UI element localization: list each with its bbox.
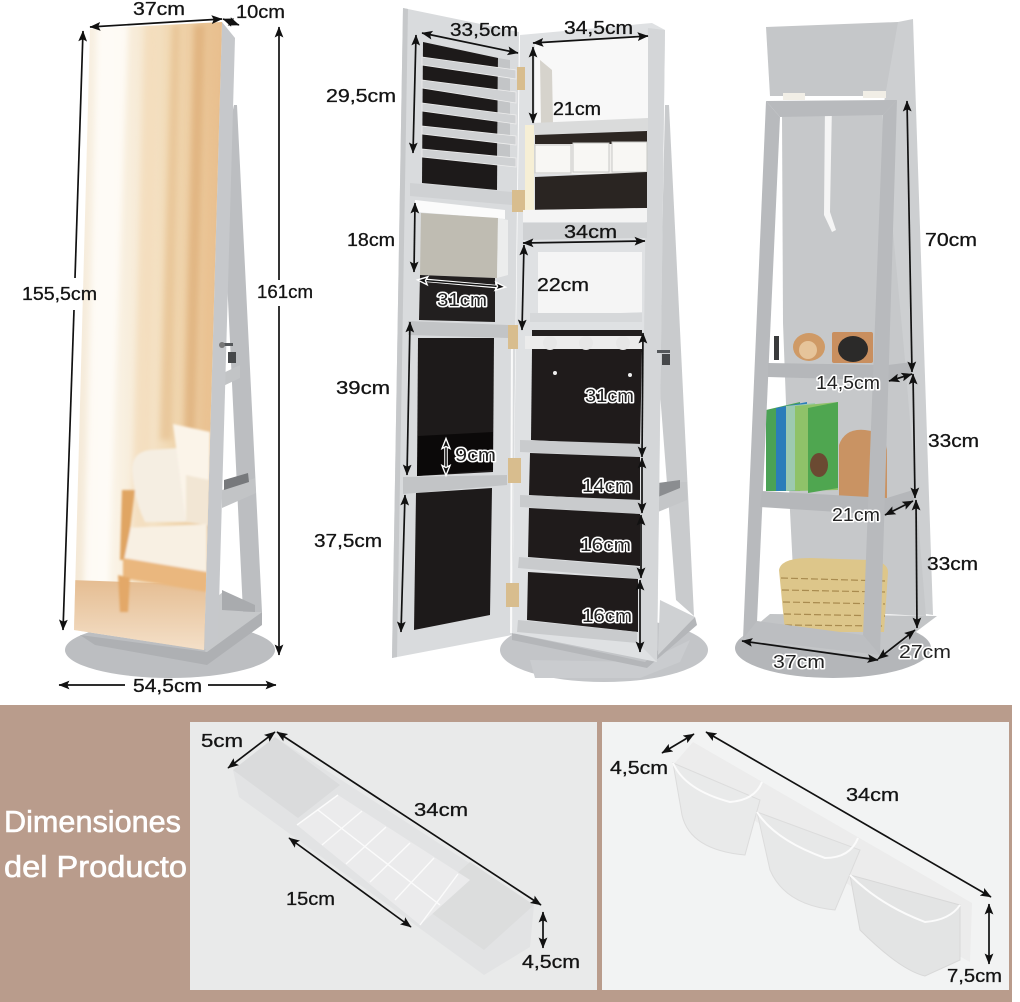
front frame with shelves	[743, 100, 914, 655]
grid 15cm: 15cm	[286, 889, 335, 909]
LED strip	[525, 125, 534, 210]
wicker basket	[779, 558, 888, 632]
clock and radio on top shelf	[793, 332, 873, 363]
depth 4,5cm: 4,5cm	[610, 758, 668, 778]
dimension labels: opened cabinet	[314, 18, 648, 652]
height 4,5cm: 4,5cm	[522, 952, 580, 972]
compartment 16cm: 16cm	[580, 535, 631, 555]
base width 54,5cm: 54,5cm	[133, 676, 202, 696]
length 34cm: 34cm	[846, 785, 899, 805]
depth 10cm	[223, 2, 285, 25]
gold hinges	[506, 67, 525, 607]
white organiser and drawer front	[523, 208, 647, 222]
compartment height 22cm: 22cm	[537, 275, 589, 295]
side key	[774, 336, 779, 360]
section 70cm	[907, 101, 977, 372]
compartment 16cm bottom	[582, 580, 640, 652]
pouch height 18cm: 18cm	[347, 230, 395, 250]
cabinet width 34,5cm: 34,5cm	[564, 18, 633, 38]
slats height 29,5cm: 29,5cm	[326, 86, 396, 106]
mirror key lock	[219, 342, 236, 363]
compartment 14cm	[582, 458, 642, 513]
three clear storage cups	[535, 142, 647, 174]
section 33cm lower	[916, 500, 978, 628]
rotating base	[735, 618, 931, 678]
base depth 27cm	[878, 630, 951, 662]
white strap	[824, 104, 836, 232]
section title: del Producto	[4, 849, 187, 884]
mirror with room reflection	[70, 15, 230, 655]
section title: Dimensiones	[4, 804, 181, 839]
back panel top and side	[766, 22, 899, 96]
base width 37cm	[742, 641, 878, 672]
width 37cm	[90, 0, 222, 27]
length 34cm: 34cm	[414, 800, 468, 820]
bottom band: accessories	[0, 705, 1012, 1002]
compartment 16cm bottom: 16cm	[582, 606, 632, 626]
length 34cm	[277, 732, 541, 905]
door necklace slats	[422, 57, 516, 167]
inner mirror upper compartment	[535, 37, 648, 133]
pouch height 18cm	[347, 203, 415, 272]
rotating base	[500, 618, 708, 682]
shelf depth 14,5cm	[816, 373, 912, 393]
door lower black boards	[419, 275, 495, 322]
section 33cm	[913, 374, 979, 498]
section 70cm: 70cm	[925, 230, 977, 250]
door upper black jewellery board	[422, 42, 498, 190]
cabinet frame	[512, 23, 665, 662]
mirror height 155,5cm	[22, 31, 97, 630]
depth 5cm	[201, 731, 275, 768]
pouch width 31cm	[418, 280, 505, 310]
product view: opened jewelry cabinet	[392, 8, 708, 682]
door section 37,5cm	[314, 495, 405, 632]
base width 37cm: 37cm	[773, 652, 825, 672]
compartment height 22cm	[522, 245, 589, 330]
depth 10cm: 10cm	[236, 2, 285, 22]
side key lock	[657, 350, 670, 365]
brown background band	[0, 705, 1012, 1002]
height 4,5cm	[522, 912, 580, 972]
hinges	[783, 93, 805, 100]
pouch width 31cm: 31cm	[437, 290, 487, 310]
slats height 29,5cm	[326, 35, 416, 153]
door section 9cm	[446, 439, 496, 475]
platform	[740, 614, 937, 659]
depth 4,5cm	[610, 734, 694, 778]
grid 15cm	[286, 838, 411, 927]
rotating round base	[65, 622, 275, 678]
compartment 31cm	[585, 333, 643, 457]
dimension labels: closed mirror	[22, 0, 313, 696]
door width 33,5cm: 33,5cm	[450, 20, 518, 40]
door mesh pouch	[420, 213, 498, 278]
organizer tray	[233, 737, 534, 975]
product view: closed mirror front	[65, 15, 275, 678]
height 7,5cm: 7,5cm	[947, 966, 1002, 986]
shelf depth 14,5cm: 14,5cm	[816, 373, 880, 393]
cutting board	[839, 430, 887, 498]
upper open compartment	[525, 242, 645, 328]
cabinet width 34,5cm	[533, 18, 648, 43]
black strip and hook knobs	[525, 330, 643, 352]
depth 5cm: 5cm	[201, 731, 243, 751]
section title	[4, 804, 187, 884]
compartment 16cm	[580, 515, 641, 578]
mirror shelf 21cm	[533, 47, 601, 123]
cups with back plate	[673, 742, 972, 976]
length 34cm	[706, 732, 991, 897]
rear A-frame leg	[220, 105, 262, 612]
door section 39cm	[336, 322, 410, 475]
panel: three cup holder	[602, 722, 1009, 990]
section 33cm: 33cm	[928, 431, 979, 451]
compartment width 34cm: 34cm	[564, 222, 617, 242]
total height 161cm: 161cm	[257, 282, 313, 302]
shelf depth 21cm: 21cm	[832, 505, 880, 525]
base depth 27cm: 27cm	[899, 642, 951, 662]
door section 39cm: 39cm	[336, 378, 390, 398]
panel: cosmetic organizer	[190, 722, 597, 990]
compartment 31cm: 31cm	[585, 386, 634, 406]
open door panel	[392, 8, 519, 658]
door width 33,5cm	[422, 20, 518, 53]
dimension labels: back view	[742, 101, 979, 672]
section 33cm lower: 33cm	[927, 554, 978, 574]
mirror shelf 21cm: 21cm	[553, 99, 601, 119]
height 7,5cm	[947, 904, 1002, 986]
books on middle shelf	[766, 402, 838, 493]
lower black compartments and shelves	[517, 350, 642, 643]
door divider with white pouch band	[410, 183, 512, 205]
mirror side edge	[204, 22, 235, 650]
door section 9cm: 9cm	[455, 445, 496, 465]
rear A-frame leg	[659, 105, 694, 616]
compartment width 34cm	[523, 222, 645, 243]
compartment 14cm: 14cm	[582, 476, 632, 496]
armchair reflection	[118, 424, 210, 612]
mirror height 155,5cm: 155,5cm	[22, 284, 97, 304]
product view: back with shelves	[735, 19, 937, 678]
door section 37,5cm: 37,5cm	[314, 531, 382, 551]
shelf depth 21cm	[832, 501, 913, 525]
